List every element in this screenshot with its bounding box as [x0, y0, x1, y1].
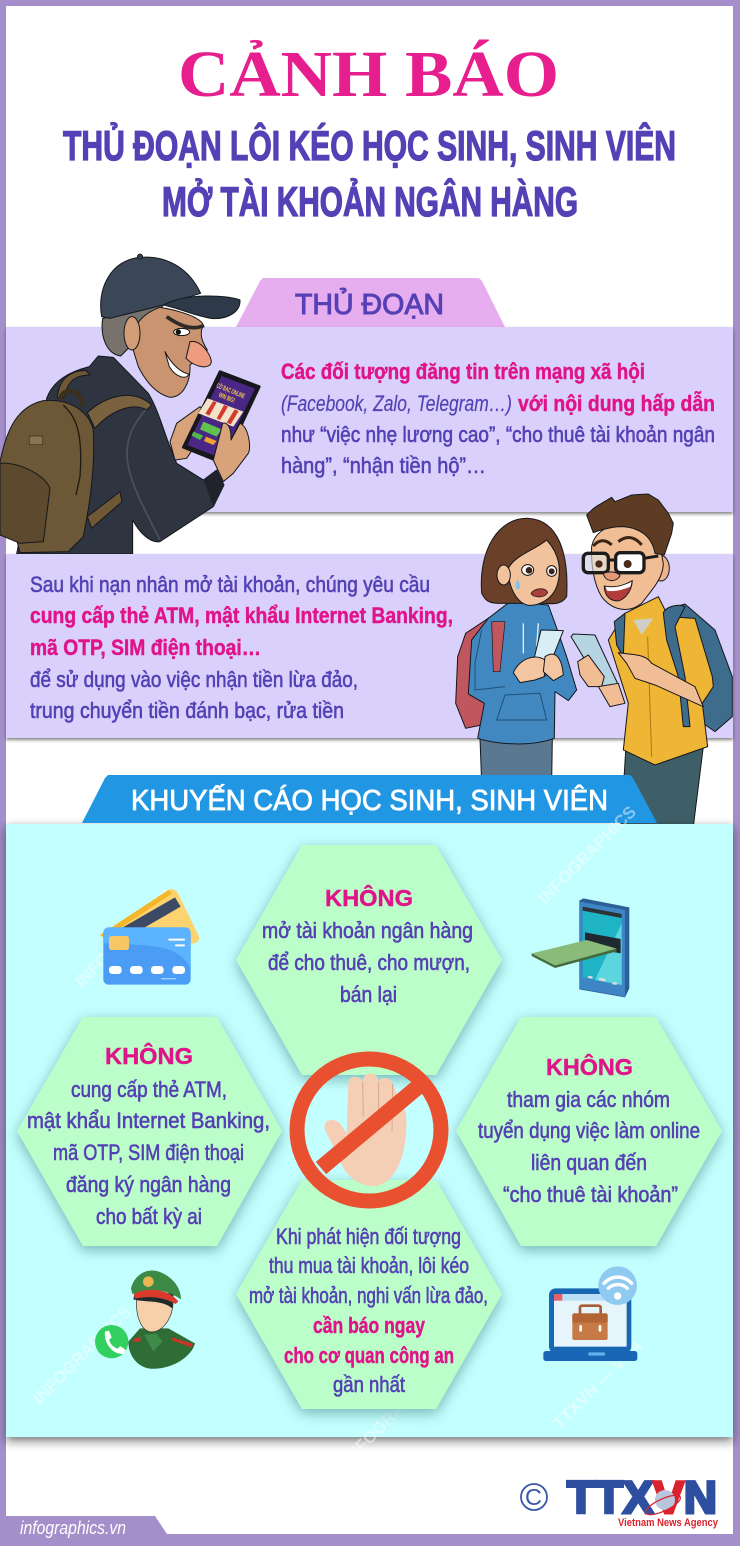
- boy face: [583, 494, 673, 609]
- subtitle: [63, 121, 676, 225]
- girl hair: [481, 518, 567, 604]
- hexagon: do not join groups: liên quan đến: [531, 1150, 647, 1175]
- text block: demands: để sử dụng vào việc nhận tiền lừa đảo,: [30, 667, 358, 692]
- phone with casino screen: WIN BIG!: [218, 392, 236, 405]
- hexagon: do not join groups: tham gia các nhóm: [507, 1087, 670, 1112]
- logo: TTXVN: TTXVN: [567, 1472, 717, 1523]
- hexagon: do not give credentials: mật khẩu Internet Banking,: [27, 1108, 270, 1133]
- hexagon: report to police: Khi phát hiện đối tượng: [276, 1224, 461, 1249]
- text block: scam post: với nội dung hấp dẫn: [518, 391, 715, 416]
- girl jeans: [480, 738, 552, 783]
- phone with casino screen: CỜ BẠC ONLINE: [215, 381, 247, 400]
- panel: scam post: [6, 327, 733, 512]
- heading tab: khuyến cáo: KHUYẾN CÁO HỌC SINH, SINH VIÊN: [131, 783, 608, 817]
- panel: after account opening: [6, 554, 733, 738]
- panel: recommendations: [6, 824, 733, 1437]
- hexagon: report to police: mở tài khoản, nghi vấn lừa đảo,: [249, 1283, 488, 1308]
- icon: stop hand in prohibition sign: [297, 1059, 441, 1201]
- text block: demands: [30, 572, 453, 723]
- scammer cap: [101, 254, 240, 319]
- icon: police officer with phone: [95, 1270, 195, 1369]
- illustration: two students with phones: [456, 494, 732, 827]
- phone with casino screen: [183, 372, 259, 463]
- hexagon: do not give credentials: cung cấp thẻ ATM,: [71, 1077, 227, 1102]
- boy jeans: [621, 747, 703, 827]
- copyright mark: [521, 1484, 547, 1510]
- watermarks: INFOGRAPHICS: [29, 1302, 135, 1408]
- icon: money from phone: [532, 898, 629, 997]
- text block: demands: mã OTP, SIM điện thoại…: [30, 635, 261, 660]
- hexagon: do not open account: mở tài khoản ngân hàng: [262, 918, 473, 943]
- hexagon: report to police: cho cơ quan công an: [284, 1343, 454, 1368]
- logo: TTXVN: Vietnam News Agency: [618, 1517, 719, 1529]
- text block: scam post: Các đối tượng đăng tin trên mạng xã hội: [281, 359, 645, 384]
- text block: demands: cung cấp thẻ ATM, mật khẩu Internet Banking,: [30, 603, 453, 628]
- scammer backpack: [0, 371, 152, 553]
- hexagon: do not give credentials: đăng ký ngân hàng: [66, 1172, 231, 1197]
- footer tab: infographics.vn: infographics.vn: [20, 1518, 126, 1538]
- hexagon: report to police: gần nhất: [333, 1372, 406, 1397]
- hexagon: report to police: cần báo ngay: [313, 1313, 425, 1338]
- scammer left hand: [170, 407, 207, 460]
- hexagon: report to police: [236, 1180, 502, 1409]
- boy shirt: [608, 597, 713, 765]
- hexagon: do not open account: bán lại: [340, 982, 397, 1007]
- hexagon: do not open account: [236, 845, 502, 1075]
- text block: scam post: hàng”, “nhận tiền hộ”…: [281, 453, 486, 478]
- text block: scam post: (Facebook, Zalo, Telegram…): [281, 391, 512, 416]
- title: CẢNH BÁO: [178, 38, 559, 111]
- heading tab: thủ đoạn: THỦ ĐOẠN: [295, 287, 444, 321]
- girl phone and hands: [513, 630, 563, 683]
- hexagon: do not join groups: “cho thuê tài khoản”: [503, 1182, 678, 1207]
- watermarks: TTXVN — VNA: [549, 1336, 646, 1433]
- boy backpack: [665, 604, 732, 732]
- scammer right hand: [213, 423, 250, 482]
- watermarks: INFOGRAPHICS: [534, 802, 640, 908]
- hexagon: do not join groups: KHÔNG: [546, 1053, 633, 1080]
- hexagon: do not join groups: tuyển dụng việc làm online: [478, 1118, 700, 1143]
- icon: bank cards: [100, 889, 199, 985]
- footer tab: infographics.vn: [0, 1516, 167, 1546]
- boy phone and hands: [571, 634, 703, 707]
- subtitle: MỞ TÀI KHOẢN NGÂN HÀNG: [162, 177, 578, 225]
- illustration: scammer with phone: [0, 254, 259, 554]
- hexagon: do not give credentials: cho bất kỳ ai: [96, 1204, 202, 1229]
- watermarks: INFOGRAPHICS: [339, 1362, 445, 1468]
- girl face: [497, 540, 559, 605]
- hexagon: do not open account: KHÔNG: [325, 884, 413, 911]
- watermarks: INFOGRAPHICS: [71, 885, 177, 991]
- heading tab: khuyến cáo: [82, 775, 657, 823]
- copyright mark: C: [525, 1484, 542, 1510]
- girl backpack: [456, 616, 505, 728]
- girl hoodie: [468, 602, 577, 744]
- scammer jacket: [17, 356, 224, 554]
- text block: demands: trung chuyển tiền đánh bạc, rửa tiền: [30, 698, 344, 723]
- text block: demands: Sau khi nạn nhân mở tài khoản, chúng yêu cầu: [30, 572, 430, 597]
- hexagon: do not give credentials: mã OTP, SIM điện thoại: [53, 1140, 244, 1165]
- heading tab: thủ đoạn: [236, 278, 505, 327]
- text block: scam post: [281, 359, 715, 478]
- hexagon: do not give credentials: KHÔNG: [105, 1042, 193, 1069]
- hexagon: do not give credentials: [17, 1017, 282, 1246]
- hexagon: do not join groups: [456, 1017, 722, 1246]
- watermarks: [29, 802, 646, 1468]
- scammer face: [124, 307, 211, 397]
- hexagon: report to police: thu mua tài khoản, lôi kéo: [269, 1253, 469, 1278]
- hexagon: do not open account: để cho thuê, cho mượn,: [268, 950, 470, 975]
- icon: laptop with job bag: [543, 1266, 637, 1361]
- scammer hair: [102, 305, 163, 356]
